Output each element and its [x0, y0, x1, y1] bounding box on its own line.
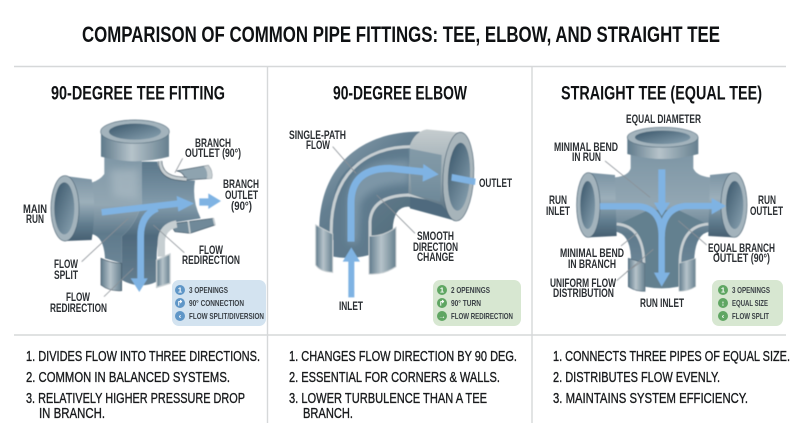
callouts: straight tee: OUTLET [750, 206, 783, 218]
key points: tee fitting: 3. RELATIVELY HIGHER PRESSURE DROP [26, 390, 245, 407]
callouts: straight tee: IN RUN [572, 152, 601, 164]
callouts: straight tee: IN BRANCH [568, 259, 616, 271]
key points: tee fitting: 1. DIVIDES FLOW INTO THREE DIRECTIONS. [26, 348, 260, 365]
key points: elbow: 1. CHANGES FLOW DIRECTION BY 90 DEG. [289, 348, 517, 365]
callouts: elbow: FLOW [306, 140, 330, 152]
callouts: straight tee [546, 114, 783, 310]
key points: tee fitting [26, 348, 260, 422]
callouts: elbow: CHANGE [417, 252, 454, 264]
legend: tee fitting: 1 [178, 286, 182, 295]
legend: straight tee: 1 [721, 286, 725, 295]
legend: elbow [433, 280, 521, 326]
callouts: elbow: INLET [339, 301, 363, 313]
key points: elbow: 3. LOWER TURBULENCE THAN A TEE [289, 390, 487, 407]
callouts: straight tee: MINIMAL BEND [560, 248, 624, 260]
legend: tee fitting: FLOW SPLIT/DIVERSION [189, 311, 264, 321]
key points: tee fitting: IN BRANCH. [39, 405, 105, 422]
heading: tee fitting: 90-DEGREE TEE FITTING [51, 84, 225, 104]
callouts: tee fitting [23, 138, 259, 315]
panel: straight tee [546, 84, 790, 407]
diagram: elbow cutaway [316, 129, 476, 297]
legend: straight tee: 3 OPENINGS [732, 285, 770, 295]
legend: straight tee: EQUAL SIZE [732, 298, 768, 308]
legend: elbow: 2 OPENINGS [451, 285, 490, 295]
legend: tee fitting: 90° CONNECTION [189, 298, 244, 308]
legend: elbow: → [438, 312, 446, 320]
callouts: straight tee: MINIMAL BEND [554, 142, 618, 154]
callouts: tee fitting: FLOW [199, 245, 223, 257]
legend: elbow: 1 [440, 286, 444, 295]
callouts: tee fitting: FLOW [66, 292, 90, 304]
legend: tee fitting [172, 280, 266, 326]
panel: 90-degree elbow [289, 84, 521, 422]
callouts: straight tee: DISTRIBUTION [553, 288, 614, 300]
heading: elbow: 90-DEGREE ELBOW [333, 84, 467, 104]
key points: elbow [289, 348, 517, 422]
callouts: tee fitting: MAIN [23, 204, 47, 216]
legend: straight tee [712, 280, 783, 326]
diagram: straight tee cutaway [577, 127, 747, 291]
callouts: tee fitting: BRANCH [223, 179, 259, 191]
callouts: tee fitting: SPLIT [54, 270, 78, 282]
callouts: straight tee: OUTLET (90°) [713, 253, 770, 265]
legend: tee fitting: ↱ [177, 298, 183, 308]
callouts: tee fitting: OUTLET [225, 190, 258, 202]
callouts: tee fitting: REDIRECTION [50, 303, 107, 315]
key points: straight tee [553, 348, 790, 407]
callouts: elbow: SMOOTH [417, 231, 454, 243]
legend: straight tee: ↕ [721, 298, 725, 308]
legend: tee fitting: ‹ [179, 312, 182, 320]
callouts: elbow: OUTLET [479, 178, 512, 190]
callouts: straight tee: RUN [758, 195, 776, 207]
callouts: tee fitting: (90°) [231, 201, 252, 213]
panel: 90-degree tee fitting [23, 84, 266, 422]
key points: elbow: 2. ESSENTIAL FOR CORNERS & WALLS. [289, 369, 500, 386]
callouts: elbow: SINGLE-PATH [289, 130, 346, 142]
callouts: tee fitting: RUN [26, 214, 44, 226]
callouts: tee fitting: BRANCH [195, 138, 231, 150]
callouts: straight tee: EQUAL BRANCH [708, 243, 775, 255]
legend: straight tee: FLOW SPLIT [732, 311, 770, 321]
key points: elbow: BRANCH. [303, 405, 353, 422]
legend: elbow: ↱ [439, 298, 445, 308]
callouts: tee fitting: OUTLET (90°) [185, 148, 241, 160]
legend: straight tee: ‹ [722, 312, 725, 320]
callouts: straight tee: RUN [549, 195, 567, 207]
callouts: tee fitting: FLOW [54, 259, 78, 271]
key points: tee fitting: 2. COMMON IN BALANCED SYSTEMS. [26, 369, 230, 386]
legend: tee fitting: 3 OPENINGS [189, 285, 228, 295]
key points: straight tee: 2. DISTRIBUTES FLOW EVENLY. [553, 369, 720, 386]
callouts: elbow: DIRECTION [413, 242, 458, 254]
callouts: straight tee: INLET [546, 206, 570, 218]
legend: elbow: 90° TURN [451, 298, 481, 308]
callouts: straight tee: UNIFORM FLOW [550, 278, 616, 290]
callouts: straight tee: RUN INLET [640, 298, 684, 310]
callouts: tee fitting: REDIRECTION [182, 255, 240, 267]
legend: elbow: FLOW REDIRECTION [451, 311, 513, 321]
diagram: tee fitting cutaway [51, 120, 221, 297]
callouts: elbow [289, 130, 512, 313]
callouts: straight tee: EQUAL DIAMETER [626, 114, 702, 126]
